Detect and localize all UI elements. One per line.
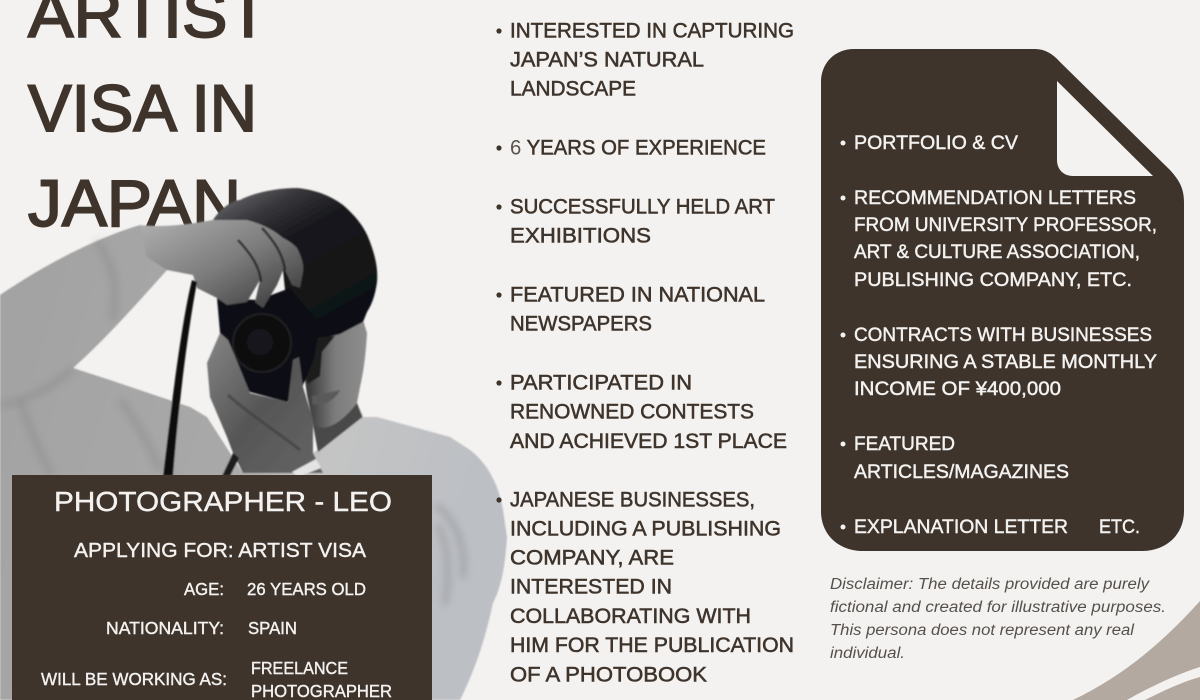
- item: japanese businesses: INCLUDING A PUBLISHING: [510, 518, 781, 540]
- panel: required documents: [821, 49, 1184, 551]
- item: explanation letter: EXPLANATION LETTER: [854, 516, 1068, 538]
- disclaimer: Disclaimer: The details provided are purely: [830, 576, 1150, 593]
- nationality: [106, 618, 297, 638]
- camera: [217, 288, 320, 402]
- sweater fold shading: [0, 240, 464, 605]
- panel: applicant profile: [12, 475, 432, 700]
- item: newspapers: FEATURED IN NATIONAL: [510, 284, 765, 306]
- item: newspapers: [510, 284, 765, 336]
- lower hand: [207, 333, 323, 473]
- bracelet: [292, 459, 321, 477]
- disclaimer: fictional and created for illustrative purposes.: [830, 599, 1166, 616]
- item: contests: PARTICIPATED IN: [510, 372, 692, 394]
- item: recommendation letters: [854, 187, 1157, 291]
- item: japanese businesses: COLLABORATING WITH: [510, 605, 751, 628]
- item: natural landscape: JAPAN’S NATURAL: [510, 48, 704, 72]
- age: 26 YEARS OLD: [247, 579, 366, 599]
- item: natural landscape: INTERESTED IN CAPTURING: [510, 20, 794, 42]
- item: articles: [854, 433, 1069, 483]
- document shape: [821, 49, 1184, 551]
- second strap: [222, 453, 239, 476]
- item: contracts: [854, 324, 1157, 400]
- item: contests: [510, 372, 787, 453]
- item: contests: AND ACHIEVED 1ST PLACE: [510, 430, 787, 453]
- finger shadows: [238, 228, 285, 282]
- upper hand: [140, 220, 303, 308]
- title: VISA IN: [28, 71, 257, 145]
- item: japanese businesses: OF A PHOTOBOOK: [510, 664, 707, 686]
- lens: [233, 314, 291, 372]
- occupation: [41, 658, 392, 700]
- photo: photographer holding camera: [0, 188, 507, 700]
- item: experience: 6 YEARS OF EXPERIENCE: [510, 136, 766, 160]
- sweater: [0, 225, 507, 700]
- nationality: SPAIN: [248, 618, 297, 638]
- mouth: [312, 390, 340, 404]
- item: contests: RENOWNED CONTESTS: [510, 400, 754, 424]
- bullet dots: [840, 140, 846, 530]
- visa type: APPLYING FOR: ARTIST VISA: [74, 539, 366, 562]
- item: recommendation letters: ART & CULTURE ASSOCIATION,: [854, 241, 1140, 263]
- occupation: WILL BE WORKING AS:: [41, 669, 227, 689]
- item: japanese businesses: JAPANESE BUSINESSES,: [510, 488, 755, 512]
- item: explanation letter: ETC.: [1099, 516, 1140, 538]
- title: [28, 0, 269, 240]
- nationality: NATIONALITY:: [106, 618, 224, 638]
- item: exhibitions: SUCCESSFULLY HELD ART: [510, 196, 775, 218]
- name heading: PHOTOGRAPHER - LEO: [54, 486, 392, 517]
- age: [184, 579, 366, 599]
- lower hand knuckle shadow: [228, 395, 300, 450]
- item: natural landscape: [510, 20, 794, 100]
- item: contracts: CONTRACTS WITH BUSINESSES: [854, 324, 1152, 346]
- disclaimer: This persona does not represent any real: [830, 622, 1135, 639]
- camera strap: [163, 280, 197, 476]
- item: recommendation letters: RECOMMENDATION LETTERS: [854, 187, 1136, 209]
- neck shadow: [313, 403, 362, 452]
- item: japanese businesses: [510, 488, 794, 686]
- item: contracts: ENSURING A STABLE MONTHLY: [854, 351, 1157, 373]
- item: japanese businesses: COMPANY, ARE: [510, 546, 674, 570]
- item: recommendation letters: FROM UNIVERSITY PROFESSOR,: [854, 214, 1157, 236]
- item: contracts: INCOME OF ¥400,000: [854, 378, 1061, 400]
- item: portfolio: PORTFOLIO & CV: [854, 132, 1018, 154]
- face: [303, 320, 367, 452]
- item: japanese businesses: INTERESTED IN: [510, 576, 672, 598]
- bullet dots: [496, 28, 502, 503]
- item: articles: ARTICLES/MAGAZINES: [854, 461, 1069, 483]
- item: natural landscape: LANDSCAPE: [510, 78, 636, 100]
- age: AGE:: [184, 579, 224, 599]
- item: japanese businesses: HIM FOR THE PUBLICATION: [510, 634, 794, 657]
- icon: folded corner: [1057, 81, 1153, 176]
- item: newspapers: NEWSPAPERS: [510, 312, 652, 336]
- item: exhibitions: [510, 196, 775, 248]
- title: JAPAN: [28, 166, 241, 240]
- occupation: FREELANCE: [251, 658, 348, 678]
- list: applicant qualifications: [496, 20, 794, 686]
- decorative swoosh corner: [1073, 601, 1200, 700]
- item: articles: FEATURED: [854, 433, 955, 455]
- item: recommendation letters: PUBLISHING COMPANY, ETC.: [854, 269, 1132, 291]
- item: exhibitions: EXHIBITIONS: [510, 224, 651, 248]
- nose and eye shadow: [300, 336, 335, 384]
- disclaimer: [830, 576, 1166, 662]
- hair: [213, 188, 377, 340]
- disclaimer: individual.: [830, 645, 905, 662]
